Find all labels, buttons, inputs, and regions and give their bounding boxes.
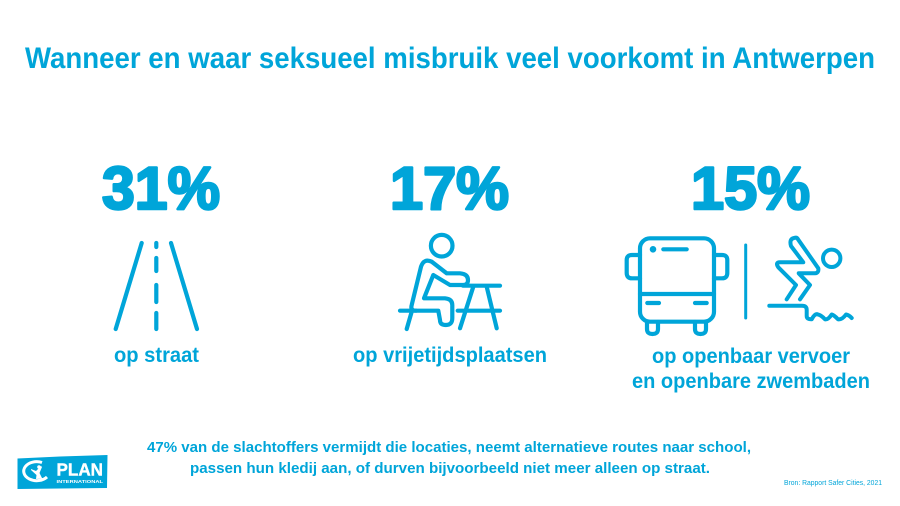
- panel: op straat: [102, 155, 220, 367]
- icon: person at picnic table: [400, 235, 500, 329]
- stat: 15%: 15%: [691, 155, 810, 222]
- label: op vrijetijdsplaatsen: op vrijetijdsplaatsen: [353, 344, 547, 367]
- logo: Plan International: PLAN: [56, 460, 103, 480]
- logo: Plan International: [18, 455, 108, 489]
- icon: road: [116, 243, 197, 329]
- panel: op openbaar vervoer en openbare zwembaden: [627, 155, 870, 393]
- panel: op vrijetijdsplaatsen: [353, 155, 547, 367]
- text block: avoidance note: passen hun kledij aan, of durven bijvoorbeeld niet meer alleen op straat.: [190, 460, 710, 477]
- text block: avoidance note: [147, 439, 751, 477]
- label: transport and pools: en openbare zwembaden: [632, 370, 870, 393]
- divider line: [744, 245, 747, 318]
- stat: 17%: 17%: [390, 155, 509, 222]
- emblem: [24, 462, 47, 481]
- stat: 31%: 31%: [102, 155, 220, 222]
- logo: Plan International: INTERNATIONAL: [56, 479, 103, 484]
- icon: bus: [627, 238, 727, 334]
- icon: diver jumping into water: [769, 238, 852, 319]
- source note: Bron: Rapport Safer Cities, 2021: [784, 480, 882, 487]
- text block: avoidance note: 47% van de slachtoffers vermijdt die locaties, neemt alternatieve routes naar school,: [147, 439, 751, 456]
- label: op straat: op straat: [114, 344, 199, 367]
- label: transport and pools: op openbaar vervoer: [652, 345, 850, 368]
- label: transport and pools: [632, 345, 870, 393]
